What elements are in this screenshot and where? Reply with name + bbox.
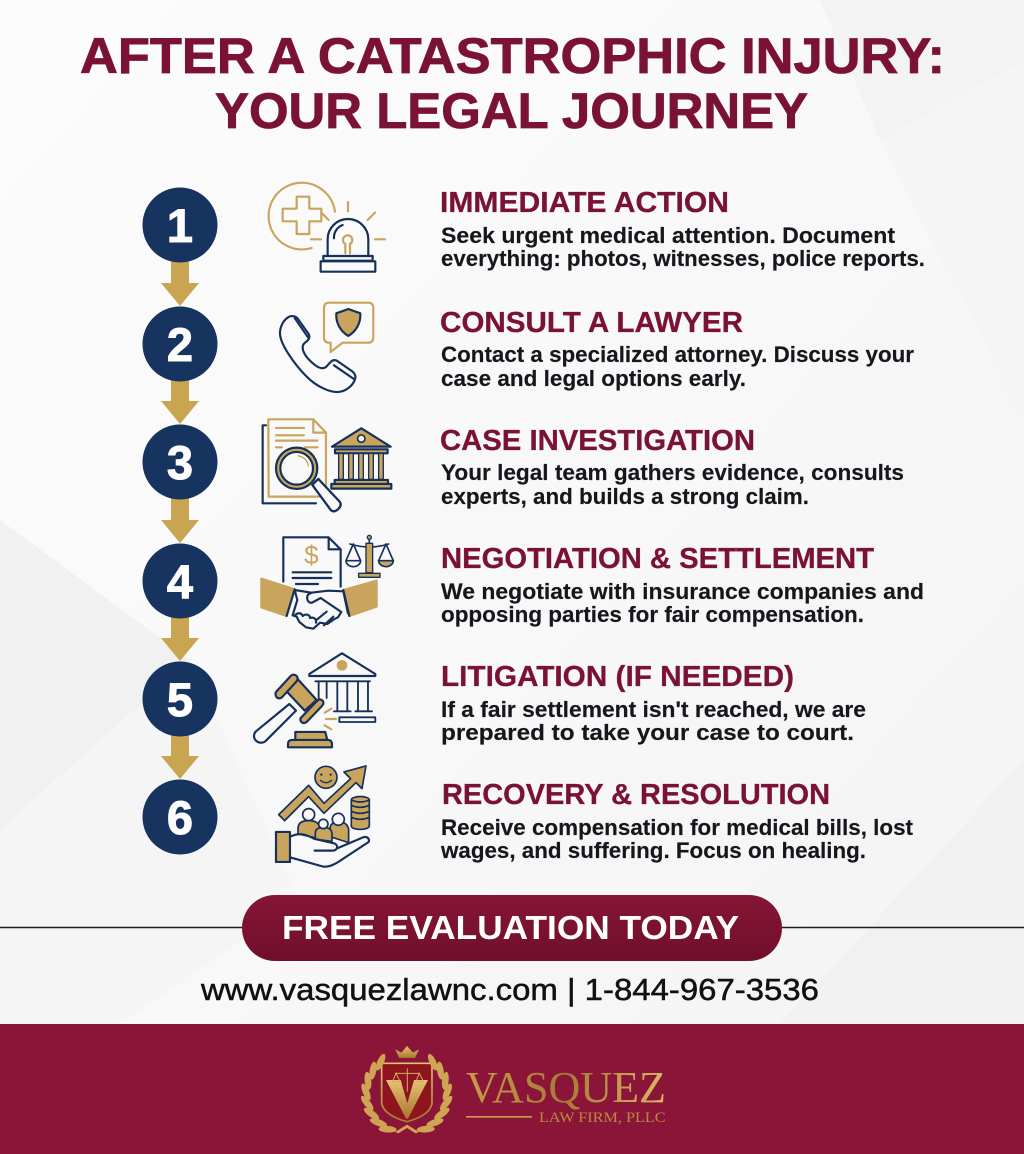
- timeline arrows: [161, 260, 199, 779]
- body text: negotiation and settlement: We negotiate with insurance companies and: [441, 579, 924, 604]
- number badge 6: 6: [167, 791, 193, 844]
- icon: phone and shield message: [280, 303, 373, 392]
- logo crown: [395, 1046, 419, 1058]
- number badge 5: [142, 662, 218, 736]
- body text: case investigation: experts, and builds a strong claim.: [441, 484, 809, 509]
- call to action button: [242, 895, 782, 961]
- body text: negotiation and settlement: opposing parties for fair compensation.: [441, 602, 864, 627]
- heading: recovery and resolution: RECOVERY & RESOLUTION: [442, 779, 830, 811]
- number badge 5: 5: [167, 673, 193, 726]
- body text: immediate action: everything: photos, witnesses, police reports.: [441, 246, 925, 271]
- number badge 4: [142, 544, 218, 618]
- icon: gavel and courthouse: [254, 653, 375, 747]
- logo laurels: [359, 1053, 454, 1133]
- title: AFTER A CATASTROPHIC INJURY:: [80, 28, 945, 84]
- heading: litigation: LITIGATION (IF NEEDED): [441, 661, 794, 693]
- logo shield: [382, 1063, 432, 1122]
- title: [80, 28, 945, 139]
- number badge 4: 4: [167, 555, 193, 608]
- icon: contract handshake and scales: $: [304, 540, 319, 570]
- icon: growth arrow, family, coins and hand: [276, 766, 369, 867]
- icon: document magnifier and courthouse: [263, 419, 391, 511]
- number badge 1: 1: [167, 199, 193, 252]
- title: YOUR LEGAL JOURNEY: [215, 83, 808, 139]
- number badge 2: 2: [167, 318, 193, 371]
- body text: recovery and resolution: wages, and suffering. Focus on healing.: [440, 838, 866, 863]
- heading: consult a lawyer: CONSULT A LAWYER: [440, 307, 743, 339]
- footer band: [0, 1024, 1024, 1154]
- logo monogram: [386, 1080, 428, 1119]
- body text: immediate action: [441, 223, 925, 271]
- body text: litigation: [441, 697, 866, 745]
- number badge 1: [142, 188, 218, 262]
- step 5: [142, 653, 866, 747]
- body text: recovery and resolution: [440, 815, 914, 863]
- logo wordmark: LAW FIRM, PLLC: [539, 1110, 666, 1126]
- divider lines: [0, 926, 1024, 928]
- step 3: [142, 419, 904, 511]
- heading: negotiation and settlement: NEGOTIATION & SETTLEMENT: [441, 543, 874, 575]
- step 2: [142, 303, 914, 392]
- body text: consult a lawyer: case and legal options early.: [441, 366, 746, 391]
- body text: litigation: prepared to take your case to court.: [441, 720, 854, 745]
- heading: immediate action: IMMEDIATE ACTION: [440, 187, 729, 219]
- body text: consult a lawyer: Contact a specialized attorney. Discuss your: [441, 342, 914, 367]
- body text: litigation: If a fair settlement isn't reached, we are: [441, 697, 866, 722]
- body text: immediate action: Seek urgent medical attention. Document: [441, 223, 896, 248]
- number badge 3: [142, 424, 218, 500]
- logo: [359, 1046, 666, 1133]
- icon: medical cross and siren: [269, 183, 385, 272]
- logo scales: [393, 1068, 423, 1092]
- number badge 3: 3: [167, 436, 193, 489]
- logo wordmark: VASQUEZ: [466, 1062, 666, 1112]
- call to action button: FREE EVALUATION TODAY: [282, 909, 739, 946]
- number badge 2: [142, 306, 218, 382]
- body text: case investigation: Your legal team gathers evidence, consults: [441, 460, 904, 485]
- number badge 6: [142, 780, 218, 854]
- heading: case investigation: CASE INVESTIGATION: [440, 425, 755, 457]
- step 1: [142, 183, 925, 272]
- step 4: [142, 535, 924, 629]
- contact details: www.vasquezlawnc.com | 1-844-967-3536: [200, 972, 819, 1007]
- body text: case investigation: [441, 460, 904, 509]
- body text: consult a lawyer: [441, 342, 914, 391]
- logo crest: [359, 1046, 454, 1133]
- body text: negotiation and settlement: [441, 579, 924, 627]
- body text: recovery and resolution: Receive compensation for medical bills, lost: [441, 815, 914, 840]
- step 6: [142, 766, 914, 867]
- icon: contract handshake and scales: [261, 535, 393, 629]
